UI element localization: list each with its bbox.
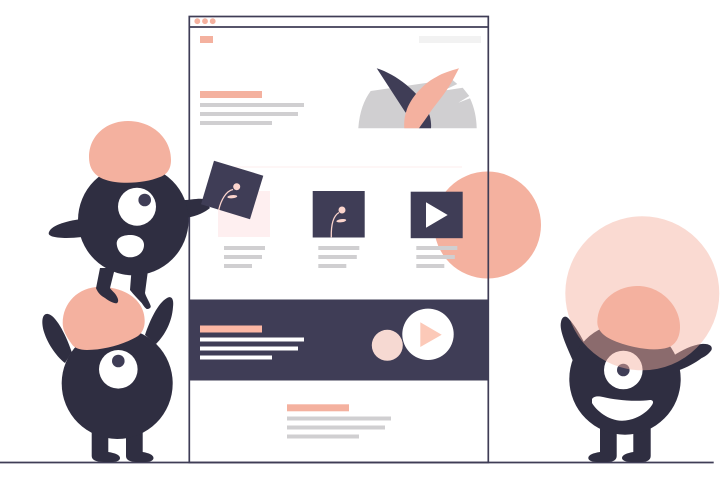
banner pale circle xyxy=(372,330,403,361)
card 2: dark image with flower xyxy=(313,191,365,238)
eye xyxy=(604,351,643,389)
decorative pink circle behind browser xyxy=(434,172,541,278)
eye xyxy=(118,188,156,226)
monster: top, holding image card xyxy=(49,121,210,309)
hero text block xyxy=(200,91,304,125)
hero image: gauge with leaves xyxy=(358,68,477,128)
monster: bottom left, holding up the other xyxy=(42,287,173,462)
card 1: pale image placeholder xyxy=(218,191,270,237)
ground line xyxy=(0,462,714,464)
dark banner xyxy=(189,300,488,380)
tilted image card held by monster xyxy=(201,161,263,219)
footer text block xyxy=(287,404,391,438)
large translucent circle xyxy=(565,216,719,370)
card 1 text lines xyxy=(224,246,265,268)
section divider xyxy=(213,166,462,168)
eye xyxy=(99,350,138,389)
card 3 text lines xyxy=(416,246,457,268)
pink hat xyxy=(89,121,171,183)
smile xyxy=(592,396,653,421)
card 2 text lines xyxy=(318,246,359,268)
banner play button xyxy=(402,309,454,360)
browser window frame xyxy=(189,16,488,462)
mouth xyxy=(117,235,144,257)
pink hat xyxy=(63,287,145,350)
card 3: video thumbnail with play icon xyxy=(411,192,463,238)
search bar placeholder xyxy=(419,36,481,43)
pink hat on right monster xyxy=(597,286,680,349)
monster: right, smiling xyxy=(561,317,712,462)
banner text block xyxy=(200,326,304,360)
logo placeholder xyxy=(200,36,213,43)
